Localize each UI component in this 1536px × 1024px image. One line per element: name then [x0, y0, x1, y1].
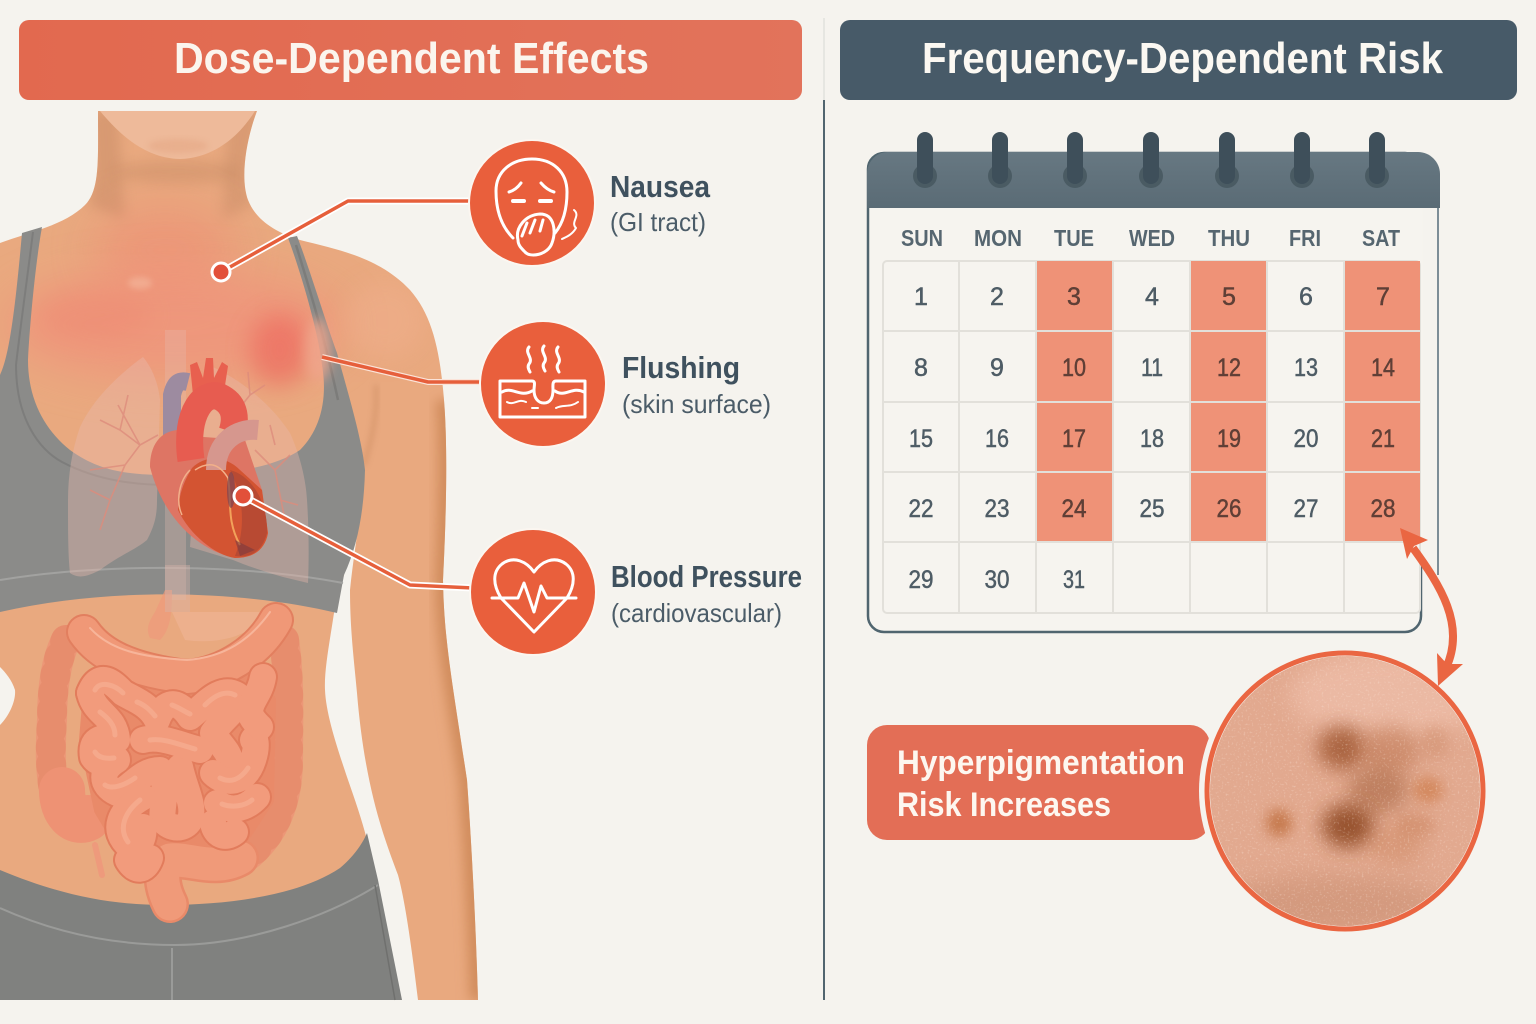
calendar body — [868, 153, 1421, 632]
date numbers: 29 — [908, 566, 934, 594]
callout: hyperpigmentation risk increases: Hyperpigmentation — [897, 744, 1185, 782]
highlighted dose days — [1037, 261, 1420, 541]
small intestine fill — [90, 677, 263, 869]
callout: hyperpigmentation risk increases: Risk Increases — [897, 786, 1111, 824]
highlighted date numbers: 19 — [1217, 425, 1241, 453]
date grid — [883, 261, 1420, 613]
leader line: flushing — [322, 357, 484, 382]
esophagus and stomach — [148, 590, 172, 640]
label: nausea: (GI tract) — [610, 207, 706, 237]
panel: frequency-dependent risk — [840, 20, 1517, 937]
date numbers: 23 — [984, 495, 1010, 523]
highlighted date numbers: 21 — [1371, 425, 1395, 453]
date numbers: 25 — [1140, 495, 1164, 523]
weekday labels — [901, 225, 1400, 251]
transverse colon — [84, 620, 276, 677]
date numbers: 13 — [1294, 354, 1318, 382]
skin close-up with hyperpigmentation — [1199, 645, 1491, 937]
double-headed arrow — [1400, 528, 1463, 686]
label: blood pressure: Blood Pressure — [611, 559, 802, 594]
highlighted date numbers: 26 — [1216, 495, 1242, 523]
heading: Frequency-Dependent Risk — [840, 20, 1517, 100]
intestine mass backing — [85, 680, 270, 860]
cecum — [62, 790, 88, 820]
highlighted date numbers: 24 — [1062, 495, 1087, 523]
date numbers: 9 — [990, 354, 1004, 382]
label: blood pressure: (cardiovascular) — [611, 598, 782, 628]
date numbers: 27 — [1294, 495, 1318, 523]
panel: dose-dependent effects — [0, 20, 802, 1000]
highlighted date numbers: 14 — [1371, 354, 1395, 382]
large intestine: ascending and descending — [51, 640, 66, 800]
skin shading and flush — [5, 111, 478, 1000]
highlighted date numbers: 7 — [1376, 283, 1390, 311]
small intestine highlight — [95, 684, 252, 842]
date numbers: 22 — [908, 495, 934, 523]
icon: nausea face — [469, 140, 595, 266]
label: blood pressure — [611, 559, 802, 628]
date numbers: 4 — [1145, 283, 1159, 311]
intestines — [51, 612, 288, 904]
weekday labels: TUE — [1054, 225, 1094, 251]
highlighted date numbers: 5 — [1222, 283, 1236, 311]
small intestine outlines — [90, 677, 263, 869]
date numbers: 8 — [914, 354, 928, 382]
heading: Dose-Dependent Effects: Dose-Dependent Effects — [174, 34, 649, 83]
date numbers — [908, 283, 1318, 594]
weekday labels: MON — [974, 225, 1022, 251]
highlighted date numbers: 17 — [1062, 425, 1086, 453]
body skin — [0, 111, 478, 1000]
lower bowel loop — [163, 858, 240, 904]
date numbers: 16 — [985, 425, 1009, 453]
date numbers: 1 — [914, 283, 928, 311]
callout: hyperpigmentation risk increases — [867, 725, 1210, 840]
date numbers: 11 — [1141, 354, 1163, 382]
bronchial branches — [90, 372, 298, 530]
date numbers: 20 — [1294, 425, 1318, 453]
label: nausea — [610, 169, 711, 237]
date numbers: 15 — [909, 425, 933, 453]
highlighted date numbers: 10 — [1062, 354, 1086, 382]
weekday labels: THU — [1208, 225, 1250, 251]
highlighted date numbers: 28 — [1370, 495, 1396, 523]
sports bra — [0, 227, 365, 613]
calendar right edge — [1437, 208, 1439, 575]
weekday labels: WED — [1129, 225, 1175, 251]
heading: Dose-Dependent Effects — [19, 20, 802, 100]
pants — [0, 833, 402, 1000]
highlighted date numbers — [1062, 283, 1396, 523]
highlighted date numbers: 12 — [1217, 354, 1241, 382]
date numbers: 18 — [1140, 425, 1164, 453]
date numbers: 2 — [990, 283, 1004, 311]
heading: Frequency-Dependent Risk: Frequency-Dependent Risk — [922, 34, 1443, 83]
sheer overlay on band — [165, 565, 190, 612]
weekday labels: SAT — [1362, 225, 1400, 251]
label: flushing: (skin surface) — [622, 389, 771, 419]
leader line: nausea — [212, 201, 472, 281]
binder rings — [913, 132, 1389, 188]
weekday labels: SUN — [901, 225, 943, 251]
panel divider — [823, 18, 825, 1000]
flushed chest area — [28, 206, 338, 396]
leader line: blood pressure — [234, 487, 473, 588]
illustration: torso with translucent organs — [0, 111, 478, 1000]
date numbers: 31 — [1063, 566, 1085, 594]
weekday labels: FRI — [1289, 225, 1321, 251]
date numbers: 6 — [1299, 283, 1313, 311]
date numbers: 30 — [984, 566, 1010, 594]
label: nausea: Nausea — [610, 169, 711, 204]
calendar header bar — [867, 152, 1440, 208]
flush fading over strap — [305, 318, 331, 382]
central vessels — [165, 330, 186, 600]
lungs — [68, 357, 309, 583]
highlighted date numbers: 3 — [1067, 283, 1081, 311]
icon: flushing skin — [480, 321, 606, 447]
label: flushing: Flushing — [622, 350, 740, 385]
heart — [150, 358, 268, 558]
label: flushing — [622, 350, 771, 419]
calendar — [867, 132, 1440, 632]
icon: blood pressure heart — [470, 529, 596, 655]
